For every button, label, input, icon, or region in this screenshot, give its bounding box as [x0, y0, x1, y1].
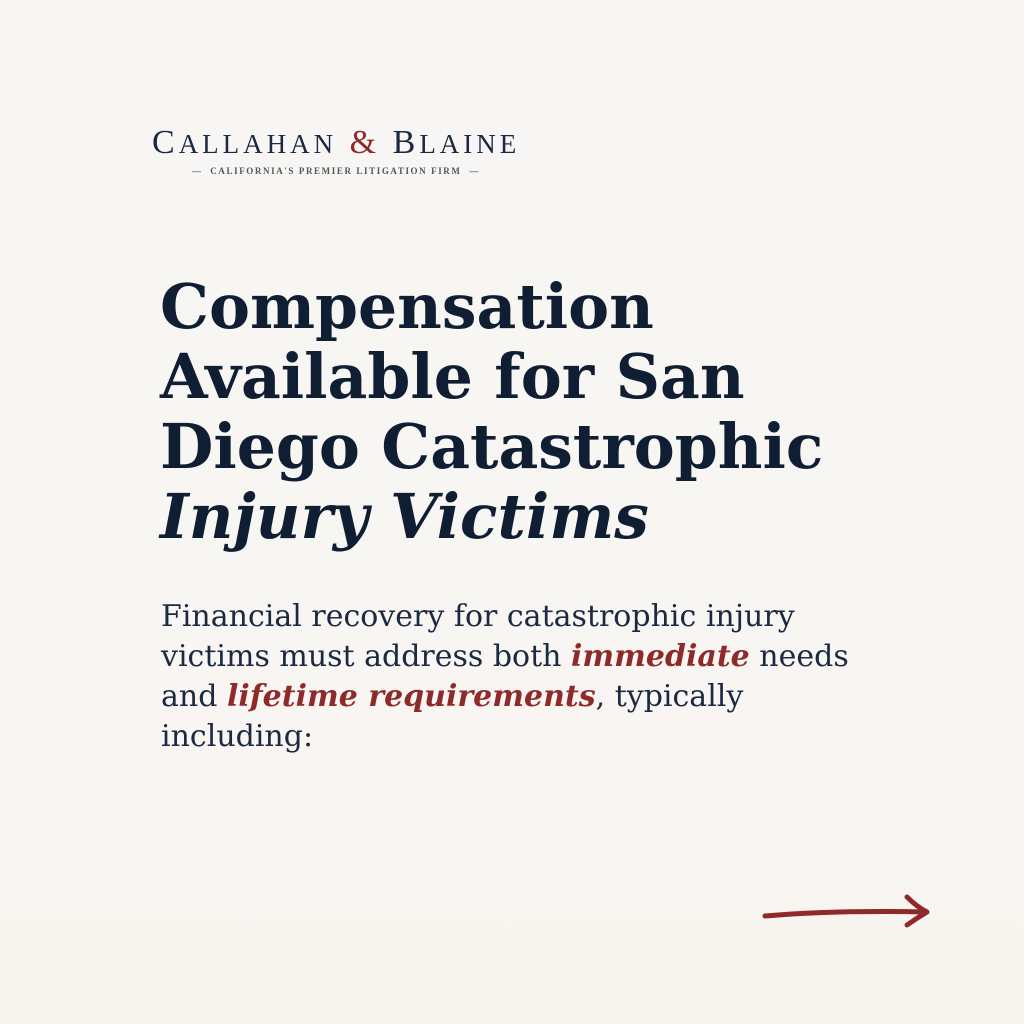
body text: including: — [161, 719, 313, 754]
arrow — [762, 894, 930, 928]
title: Diego Catastrophic — [160, 410, 823, 483]
body text: victims must address both immediate needs — [161, 639, 849, 674]
logo wordmark: CALLAHAN & BLAINE — [152, 124, 520, 161]
title: Available for San — [160, 340, 745, 413]
title: Compensation — [160, 270, 654, 343]
title: Injury Victims — [160, 480, 649, 553]
body text: Financial recovery for catastrophic injury — [161, 599, 795, 634]
body text — [160, 599, 849, 754]
logo tagline: — CALIFORNIA'S PREMIER LITIGATION FIRM — — [192, 166, 480, 176]
body text: and lifetime requirements, typically — [161, 679, 743, 714]
title — [158, 270, 823, 553]
